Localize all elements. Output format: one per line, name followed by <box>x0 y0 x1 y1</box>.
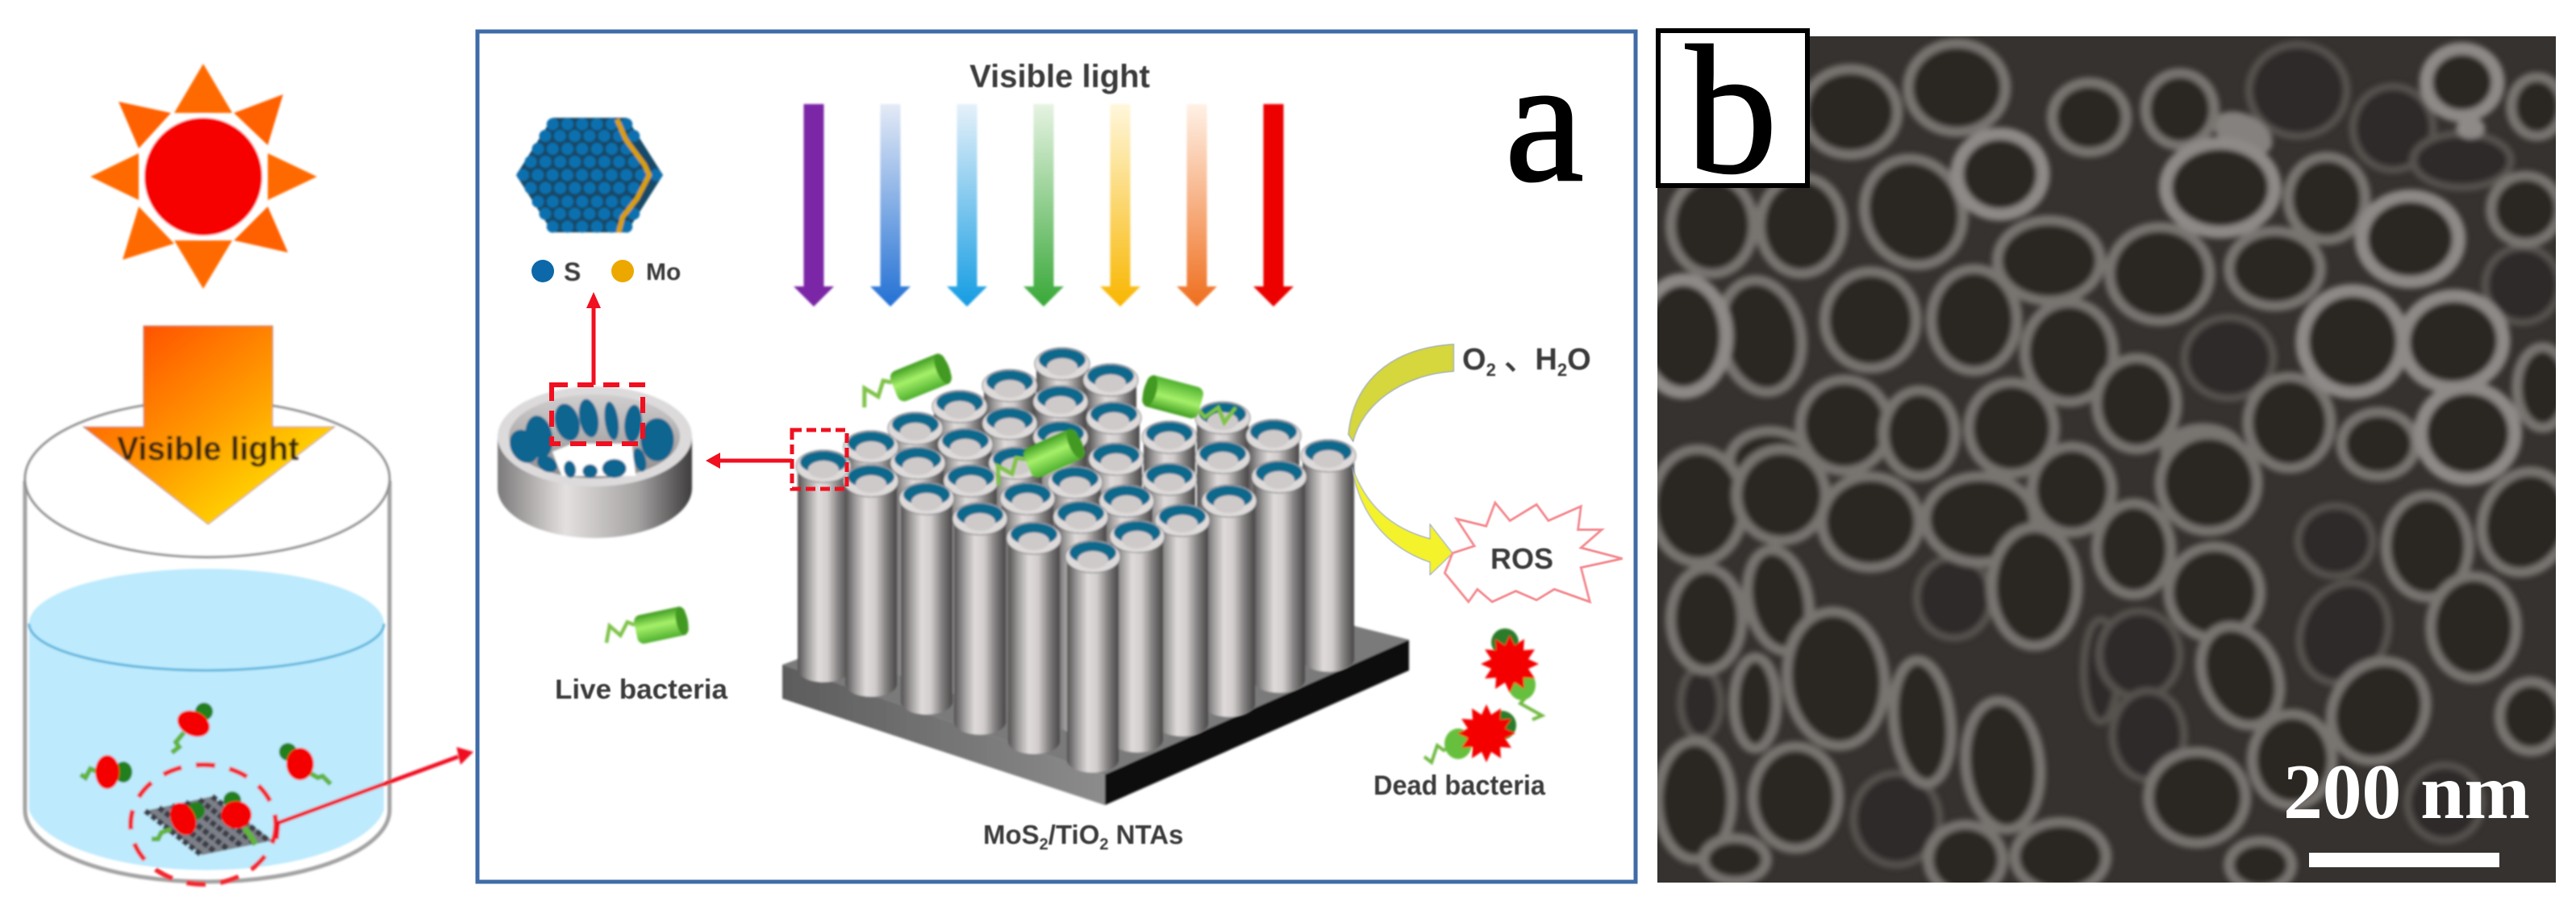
dashed circle <box>131 765 276 884</box>
dashed box on tube <box>792 430 847 489</box>
label: O2 H2O: 2 <box>1486 360 1496 380</box>
label: O2 H2O: O <box>1462 343 1486 377</box>
MoS2 hexagon lattice <box>516 118 663 232</box>
label: MoS2/TiO2 NTAs: 2 <box>1099 836 1108 854</box>
label: live bacteria: Live bacteria <box>555 674 728 705</box>
enlarged nanotube ring <box>498 386 692 538</box>
label: MoS2/TiO2 NTAs: 2 <box>1040 836 1048 854</box>
panel letter a: a <box>1505 22 1584 219</box>
beaker <box>25 400 390 882</box>
arrow: to detail panel <box>277 747 473 839</box>
legend: S and Mo atoms: S <box>564 257 581 286</box>
label: MoS2/TiO2 NTAs: NTAs <box>1108 820 1183 849</box>
dead bacteria icons <box>1424 628 1542 762</box>
label: O2 H2O: 、H <box>1496 343 1557 377</box>
arrow: tube to ring <box>706 453 792 469</box>
nanotube array <box>796 348 1356 773</box>
label: O2 H2O: 2 <box>1557 360 1567 380</box>
panel letter b <box>1658 9 1807 212</box>
label: MoS2/TiO2 NTAs: /TiO <box>1048 820 1099 849</box>
arrow: to ROS <box>1352 467 1453 574</box>
substrate <box>782 557 1409 805</box>
arrow: O2 H2O <box>1348 344 1453 441</box>
label: MoS2/TiO2 NTAs: MoS <box>983 820 1040 849</box>
panel: a mechanism <box>498 22 1623 854</box>
panel: b SEM micrograph <box>1640 9 2576 895</box>
panel a frame <box>477 31 1636 882</box>
label: O2 H2O: O <box>1567 343 1591 377</box>
dashed box on ring <box>552 385 643 444</box>
arrows and ROS <box>1348 344 1623 602</box>
label: ROS: ROS <box>1490 542 1553 575</box>
label: visible light: Visible light <box>117 430 299 467</box>
heading: visible light: Visible light <box>969 59 1150 94</box>
live bacterium legend <box>602 605 690 651</box>
SEM image <box>1640 36 2576 895</box>
legend: S and Mo atoms: Mo <box>646 259 681 286</box>
catalyst sheet <box>145 791 273 855</box>
arrow: ring to lattice <box>586 292 601 385</box>
bacteria in water <box>81 703 331 789</box>
icon: sun <box>90 64 317 289</box>
scale label: 200 nm <box>2283 749 2530 836</box>
ROS burst <box>1444 503 1623 602</box>
legend: S and Mo atoms <box>531 257 681 286</box>
panel: beaker under visible light <box>25 64 473 884</box>
visible light arrows <box>794 104 1294 307</box>
bacteria on sheet <box>152 791 256 845</box>
scale bar <box>2309 853 2499 867</box>
panel letter b: b <box>1686 9 1778 212</box>
live bacteria on array <box>856 352 1238 494</box>
label: dead bacteria: Dead bacteria <box>1373 770 1546 801</box>
arrow: visible light <box>83 326 335 524</box>
